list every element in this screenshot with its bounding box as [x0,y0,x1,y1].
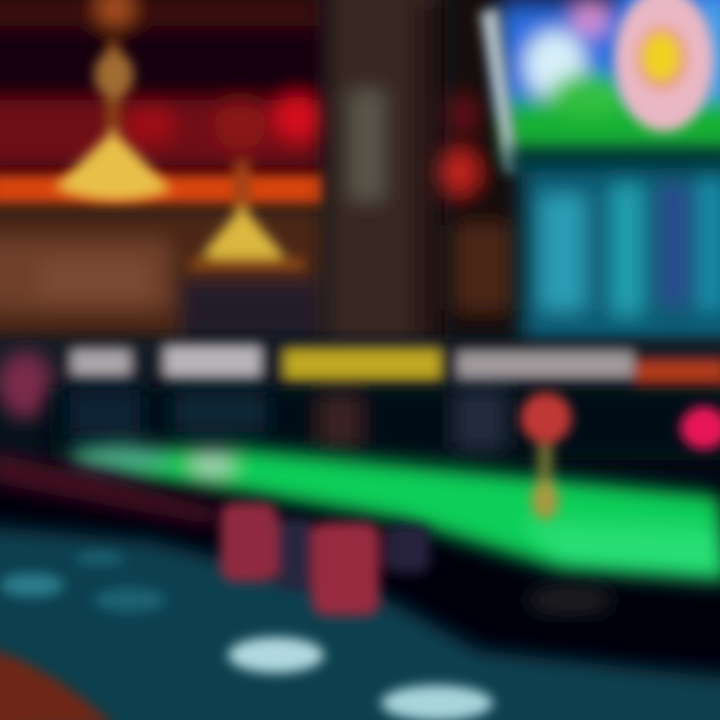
pendant lamp right [190,160,305,270]
lower right screen [505,150,720,345]
green table [70,444,720,582]
white felt markers [0,551,493,720]
left pink seat [0,351,53,419]
back wall with red bands [0,0,330,195]
standing figure [520,392,572,520]
left red table edge [0,452,225,525]
black table rim [0,470,720,670]
upper right screen [480,0,720,172]
chip stacks [220,502,430,616]
orange light band [0,174,325,204]
target circle [614,0,714,132]
pendant lamp left [54,40,172,201]
pink light [680,406,720,450]
wood panelling [0,205,325,340]
grey table shadow detail [526,586,614,614]
central column [326,0,446,345]
dark bar counter [50,388,720,460]
dark area with red spot [438,0,525,340]
bottom left wooden corner [0,650,115,720]
bar sign strip [0,340,720,390]
teal felt foreground [0,525,720,720]
